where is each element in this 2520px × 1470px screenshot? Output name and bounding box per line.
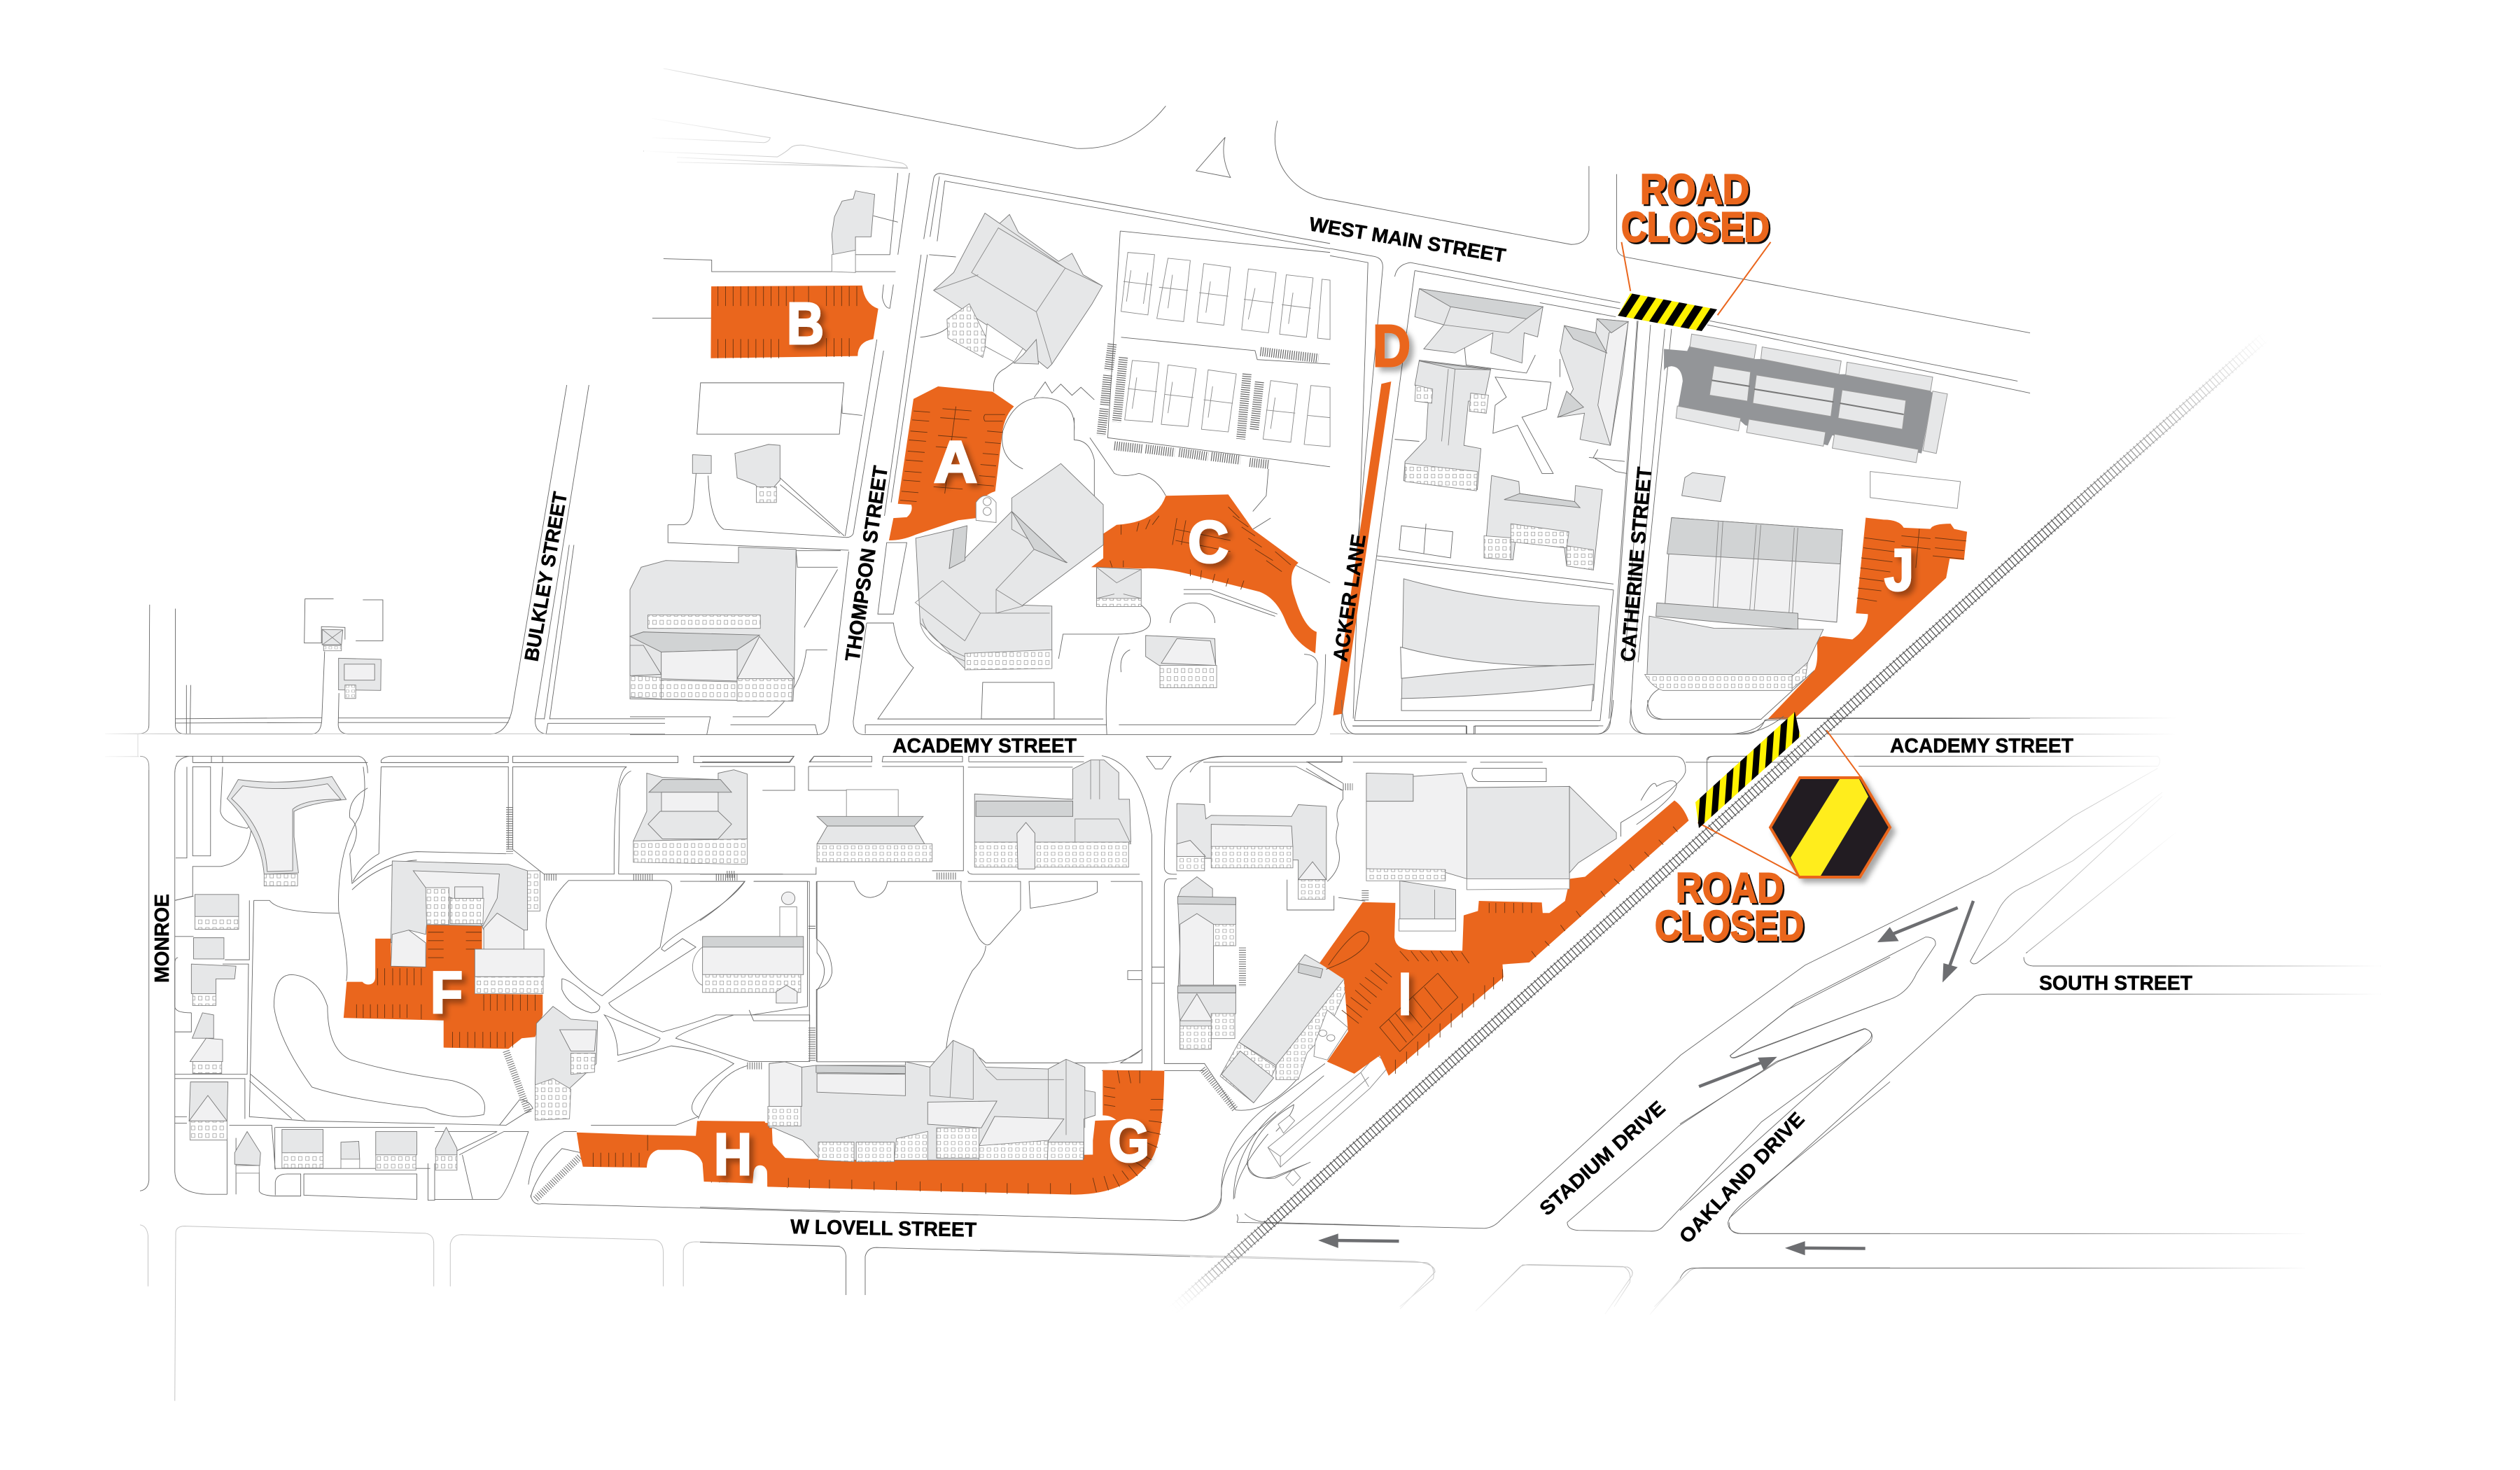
road closed callout: south: ROAD [1676,864,1784,911]
street labels: MONROE [151,894,174,983]
fade overlay bottom edge [1050,1270,2450,1320]
road linework: far west block [105,385,665,757]
building: east dorm [1558,318,1628,445]
building: west main dorm [1415,288,1543,363]
road closed callout: north: CLOSED [1621,204,1770,251]
street labels: ACADEMY STREET [892,735,1077,757]
building: south of F [535,1007,598,1120]
small house: south of north west [339,658,381,699]
railroad tracks [1169,332,2269,1315]
street labels: WEST MAIN STREET [1308,213,1507,267]
building: round house [1146,636,1217,687]
road linework and grounds: north central campus [630,69,1330,734]
parking lot letters [430,290,1914,1187]
blank overlay east of academy street [2177,700,2520,955]
building: chapel [934,214,1102,368]
callout leaders: south closure [1698,730,1861,877]
road linework: east side and parking lot I [1190,700,1890,1307]
tennis courts [1121,253,1330,447]
building: large central hall [915,463,1103,670]
small house: north west [322,629,343,651]
street labels: STADIUM DRIVE [1535,1097,1670,1219]
small house: lower Thompson [692,444,780,503]
fade overlay: lower east roads [2065,1218,2310,1281]
road linework: south east roads [1680,718,2380,1279]
small house: upper Thompson [832,191,875,272]
building: south hall [1177,877,1236,1049]
parking lot G [700,1070,1164,1195]
parking lot letters: C [1188,509,1228,575]
building: small house [1682,472,1725,502]
outline: empty pad [1870,472,1961,508]
road closed callout: south [1655,864,1804,949]
building: academy hall [634,770,747,864]
street labels: ACADEMY STREET [1890,735,2073,757]
building: athletic center [1366,773,1616,931]
street labels: W LOVELL STREET [790,1216,977,1242]
row of houses on Lovell [234,1127,457,1173]
street labels: OAKLAND DRIVE [1675,1108,1809,1247]
parking lot I [1320,801,1688,1076]
building: arena [1401,579,1600,710]
street labels: CATHERINE STREET [1617,466,1656,663]
parking lot letters: A [934,429,977,495]
road linework and buildings: southwest campus [140,756,840,1401]
road closed callout: north [1621,166,1770,251]
street labels: THOMPSON STREET [841,464,892,663]
building: large diagonal hall [1220,955,1348,1103]
street labels: ACKER LANE [1329,533,1371,663]
building: star shaped hall [227,776,346,886]
parking lot B [710,286,878,358]
parking lot letters: G [1109,1108,1149,1174]
parking lot letters: J [1884,537,1914,603]
parking structure [1664,334,1947,463]
road closure barrier: west main street [1618,293,1717,331]
building: curved front hall [1645,603,1823,690]
road closed callout: south: CLOSED [1655,902,1804,949]
fade overlay: top left road ends [644,63,798,217]
stairs [506,807,812,1199]
blank area below fade [1050,1320,2520,1470]
parking lot J [1768,518,1967,720]
building: east of campus drive [1177,804,1326,899]
small depot sheds [1278,1115,1301,1186]
fade overlay: east academy and diagonal roads [1946,714,2177,952]
parking lot A [889,386,1014,540]
building: academy street east hall [974,760,1130,869]
icon: road closed hazard legend hexagon [1770,778,1890,877]
building: academy street central hall [817,790,932,862]
parking lot letters: D [1373,313,1410,379]
parking lot letters: F [430,960,463,1026]
parking lot letters: I [1399,961,1411,1027]
small house: next to lot C [1097,567,1141,606]
fade overlay: west academy street [98,728,161,770]
road closed callout: north: ROAD [1640,166,1749,213]
road closure barrier: academy street [1695,712,1800,828]
parking lot letters: H [714,1121,752,1187]
parking lot letters: B [787,290,824,356]
building: train depot [1268,1055,1390,1167]
building: west performance hall [630,547,796,701]
building: south dorm [1484,475,1602,570]
road linework and buildings: south central campus [700,756,1400,1295]
building: central dorm [1404,360,1491,491]
fade overlay: south street [2170,955,2380,1018]
road linework and buildings: northeast campus [1330,166,2030,734]
row of houses on Monroe [189,895,239,1140]
parking lot D [1333,382,1391,715]
parking lot F [344,925,542,1049]
street labels: SOUTH STREET [2039,972,2192,995]
direction arrows [1318,901,1973,1255]
callout leaders: north closure [1621,242,1771,315]
tennis bleachers [1101,344,1318,465]
round gazebo [976,496,996,523]
lower street blocks [980,1250,1680,1315]
building: F lot hall [391,861,544,994]
street labels [151,213,2192,1247]
parking lot H [577,1121,840,1188]
building: chapel with tower [692,892,804,1003]
street labels: BULKLEY STREET [520,490,571,663]
building: south campus main complex [768,1040,1095,1162]
stairs [727,787,1365,1110]
building: large warehouse [1665,518,1842,622]
parking lot C [1091,494,1317,653]
